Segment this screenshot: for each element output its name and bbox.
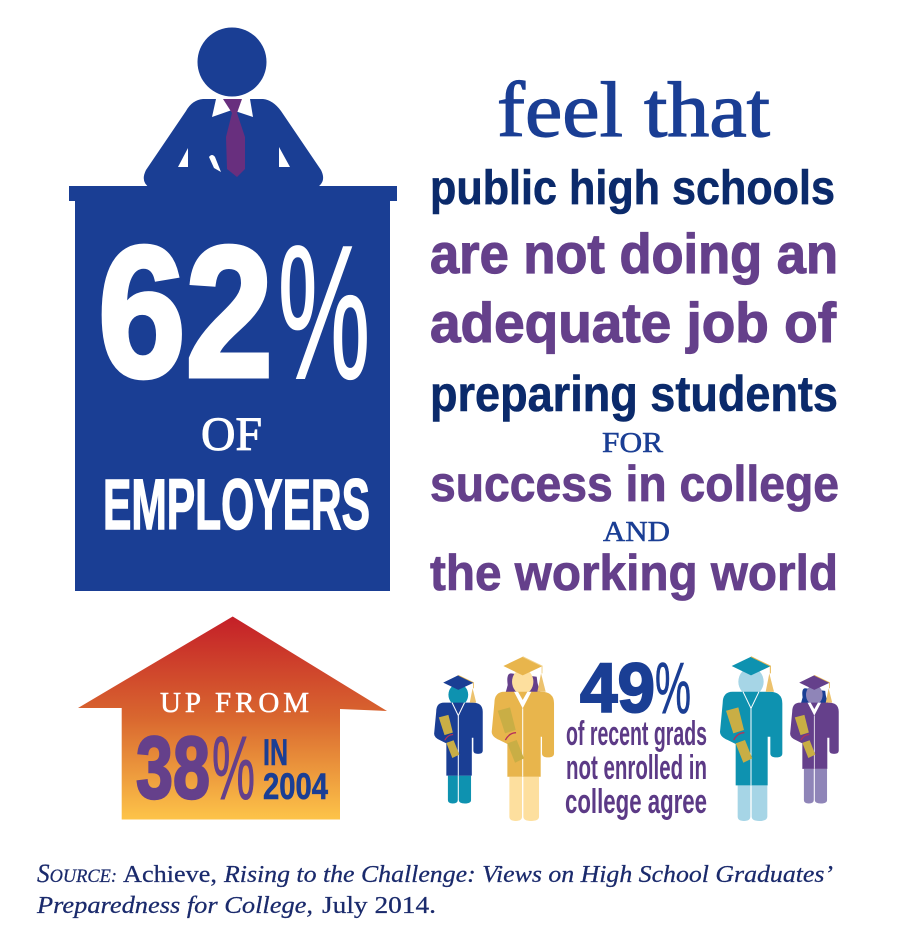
icon: large gold graduate bbox=[492, 657, 554, 821]
statistic: 62 percent: % bbox=[278, 207, 370, 419]
source citation: July 2014. bbox=[322, 893, 436, 919]
statistic: 62 percent: 62 bbox=[98, 209, 273, 416]
source citation: Preparedness for College, bbox=[36, 893, 313, 919]
panel: recent grads bbox=[434, 649, 839, 821]
line: adequate job of: adequate job of bbox=[430, 291, 836, 354]
statistic: 49 percent: 49 bbox=[580, 649, 655, 727]
label: 2004: 2004 bbox=[263, 766, 328, 807]
text: of recent grads: of recent grads bbox=[566, 715, 707, 753]
panel: employer at podium bbox=[69, 28, 397, 591]
line: are not doing an: are not doing an bbox=[430, 222, 838, 285]
icon: small purple graduate bbox=[790, 675, 839, 803]
line: public high schools: public high schools bbox=[430, 162, 835, 215]
line: and: AND bbox=[603, 517, 670, 548]
arrow: upward house shape bbox=[78, 616, 387, 820]
label: of: OF bbox=[201, 408, 262, 461]
source citation: Rising to the Challenge: Views on High School Graduates’ bbox=[223, 862, 833, 888]
icon: large teal graduate bbox=[720, 657, 782, 821]
statistic: 49 percent: % bbox=[655, 649, 691, 729]
text: college agree: college agree bbox=[565, 783, 707, 821]
label: in: IN bbox=[263, 732, 288, 773]
label: employers: EMPLOYERS bbox=[103, 466, 370, 545]
line: for: FOR bbox=[602, 428, 663, 459]
line: preparing students: preparing students bbox=[430, 366, 838, 422]
source citation bbox=[36, 859, 833, 919]
text: not enrolled in: not enrolled in bbox=[566, 749, 707, 787]
icon: employer figure bbox=[144, 28, 323, 188]
arrow callout: up from 38 percent in 2004 bbox=[78, 616, 387, 820]
podium bbox=[69, 186, 397, 591]
statistic: 38 percent: 38 bbox=[136, 718, 210, 817]
line: success in college: success in college bbox=[430, 456, 839, 512]
line: the working world: the working world bbox=[430, 545, 838, 601]
statistic: 38 percent: % bbox=[212, 719, 255, 819]
label: up from: UP FROM bbox=[160, 687, 309, 719]
heading: feel that: feel that bbox=[497, 66, 770, 153]
source citation: Achieve, bbox=[123, 862, 217, 888]
icon: small navy graduate bbox=[434, 675, 483, 803]
source citation: SOURCE: bbox=[37, 859, 117, 888]
statistic: 49 percent bbox=[580, 649, 691, 729]
statement text block bbox=[430, 66, 839, 601]
